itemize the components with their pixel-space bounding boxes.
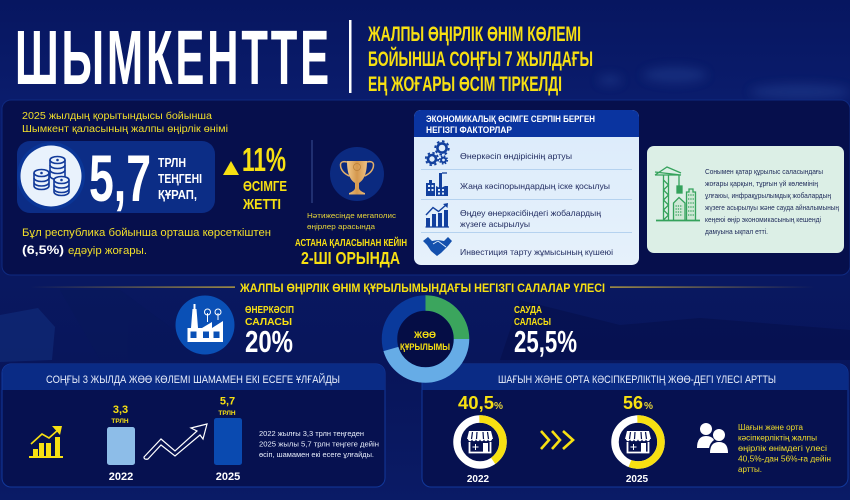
stat: 2022 SME share: % — [494, 401, 503, 412]
stat: growth 11%: ЖЕТТІ — [242, 196, 281, 213]
subtitle — [367, 22, 593, 96]
arrow: chevrons — [541, 431, 573, 449]
icon: trophy — [330, 147, 384, 201]
intro text: 2025 жылдың қорытындысы бойынша — [22, 110, 212, 122]
stat: 2025 SME share: 2025 — [626, 474, 649, 485]
section heading: sector shares: ЖАЛПЫ ӨҢІРЛІК ӨНІМ ҚҰРЫЛЫМЫНДАҒЫ НЕГІЗГІ САЛАЛАР ҮЛЕСІ — [239, 281, 605, 295]
subtitle: БОЙЫНША СОҢҒЫ 7 ЖЫЛДАҒЫ — [368, 46, 593, 71]
title divider — [349, 20, 352, 93]
ranking text: 2-ШІ ОРЫНДА — [301, 248, 400, 268]
icon: crane and buildings — [655, 167, 700, 220]
icon: shop — [467, 431, 493, 452]
description: 2022 жылғы 3,3 трлн теңгеден — [259, 429, 364, 438]
icon: rising chart — [29, 426, 63, 458]
factor 4: investment — [423, 237, 613, 257]
stat: industry share: САЛАСЫ — [245, 317, 292, 328]
bar chart: 2022 vs 2025: ТРЛН — [111, 418, 129, 425]
stat: growth 11%: 11% — [242, 141, 286, 178]
description: Шағын және орта — [738, 423, 804, 432]
description: артты. — [738, 465, 762, 474]
stat: growth 11%: ӨСІМГЕ — [243, 178, 287, 195]
description: 2025 жылы 5,7 трлн теңгеге дейін — [259, 440, 379, 448]
intro text: Шымкент қаласының жалпы өңірлік өнімі — [22, 124, 228, 135]
comparison text: (6,5%) — [22, 243, 64, 257]
panel title: ШАҒЫН ЖӘНЕ ОРТА КӘСІПКЕРЛІКТІҢ ЖӨӨ-ДЕГІ ҮЛЕСІ АРТТЫ — [498, 374, 776, 386]
stat: 2022 SME share: 40,5 — [458, 393, 494, 413]
stat: 2025 SME share — [615, 393, 661, 485]
stat: 2025 SME share: 56 — [623, 393, 643, 413]
bar chart: 2022 vs 2025: 2022 — [109, 471, 133, 483]
stat: GRP value: 5,7 — [89, 141, 151, 215]
arrow: growth — [144, 424, 207, 459]
ranking text — [295, 211, 407, 268]
construction text: ұлғаюы, инфрақұрылымдық жобалардың — [705, 191, 832, 200]
factors heading — [426, 114, 595, 135]
stat: trade share: САЛАСЫ — [514, 317, 551, 328]
description — [259, 429, 379, 459]
chart: GRP structure donut: ЖӨӨ — [413, 330, 436, 340]
construction text — [705, 167, 840, 236]
bar chart: 2022 vs 2025: 2025 — [216, 471, 240, 483]
panel: GRP doubled — [2, 364, 385, 487]
construction text: кеңеюі өңір экономикасының кешенді — [705, 215, 821, 224]
stat: 2022 SME share: 2022 — [467, 474, 490, 485]
panel: SME share — [422, 364, 848, 487]
construction text: Сонымен қатар құрылыс саласындағы — [705, 167, 823, 176]
factor 3: processing projects: жүзеге асырылуы — [460, 219, 530, 229]
stat: industry share — [176, 296, 294, 359]
bar chart: 2022 vs 2025 — [107, 396, 242, 483]
stat: trade share — [514, 305, 577, 359]
intro text — [22, 110, 228, 135]
subtitle: ЕҢ ЖОҒАРЫ ӨСІМ ТІРКЕЛДІ — [368, 72, 562, 96]
factors heading: ЭКОНОМИКАЛЫҚ ӨСІМГЕ СЕРПІН БЕРГЕН — [426, 114, 595, 124]
stat: GRP value: ТЕҢГЕНІ — [158, 172, 202, 186]
description: өсіп, шамамен екі есеге ұлғайды. — [259, 450, 374, 459]
factor 2: new enterprises — [426, 173, 610, 196]
factor 1: industrial output: Өнеркәсіп өндірісінің артуы — [460, 151, 572, 161]
factor 3: processing projects — [426, 203, 601, 229]
icon: shop — [625, 431, 651, 452]
description: өңірлік өнімдегі үлесі — [738, 444, 827, 453]
panel: growth factors — [414, 110, 639, 265]
comparison text: Бұл республика бойынша орташа көрсеткіштен — [22, 227, 271, 239]
comparison text: едәуір жоғары. — [68, 245, 147, 257]
ranking text: Нәтижесінде мегаполис — [307, 211, 396, 220]
subtitle: ЖАЛПЫ ӨҢІРЛІК ӨНІМ КӨЛЕМІ — [367, 22, 581, 46]
stat: GRP value: ҚҰРАП, — [158, 188, 197, 202]
description: кәсіпкерліктің жалпы — [738, 434, 817, 442]
factor 4: investment: Инвестиция тарту жұмысының күшеюі — [460, 247, 613, 257]
bar chart: 2022 vs 2025: ТРЛН — [218, 410, 236, 417]
stat: trade share: 25,5% — [514, 324, 577, 359]
icon: coins — [17, 142, 85, 210]
ranking text: АСТАНА ҚАЛАСЫНАН КЕЙІН — [295, 236, 407, 249]
main title: ШЫМКЕНТТЕ — [15, 15, 332, 101]
factor 1: industrial output — [426, 141, 572, 165]
comparison text — [22, 227, 271, 257]
chart: GRP structure donut: ҚҰРЫЛЫМЫ — [400, 342, 450, 352]
chart: GRP structure donut — [390, 303, 462, 375]
factor 2: new enterprises: Жаңа кәсіпорындардың іске қосылуы — [460, 181, 610, 191]
bar chart: 2022 vs 2025: 3,3 — [113, 404, 128, 416]
panel title: СОҢҒЫ 3 ЖЫЛДА ЖӨӨ КӨЛЕМІ ШАМАМЕН ЕКІ ЕСЕГЕ ҰЛҒАЙДЫ — [46, 373, 340, 386]
stat: growth 11% — [223, 141, 287, 213]
description — [738, 423, 831, 474]
factors heading: НЕГІЗГІ ФАКТОРЛАР — [426, 125, 512, 135]
stat: trade share: САУДА — [514, 305, 542, 316]
stat: 2025 SME share: % — [644, 401, 653, 412]
construction text: жоғары қарқын, тұрғын үй көлемінің — [705, 179, 819, 188]
stat: GRP value — [17, 141, 215, 215]
ranking text: өңірлер арасында — [307, 222, 376, 231]
stat: 2022 SME share — [457, 393, 503, 485]
stat: industry share: ӨНЕРКӘСІП — [245, 305, 294, 316]
stat: industry share: 20% — [245, 324, 293, 359]
panel: key results — [2, 100, 850, 275]
factor 3: processing projects: Өңдеу өнеркәсібіндегі жобалардың — [460, 208, 601, 218]
description: 40,5%-дан 56%-ға дейін — [738, 454, 831, 464]
icon: people — [697, 423, 728, 453]
construction text: дамуына ықпал етті. — [705, 227, 768, 236]
panel: construction note — [647, 146, 844, 253]
bar chart: 2022 vs 2025: 5,7 — [220, 396, 235, 408]
icon: factory — [176, 296, 234, 354]
stat: GRP value: ТРЛН — [158, 156, 186, 170]
